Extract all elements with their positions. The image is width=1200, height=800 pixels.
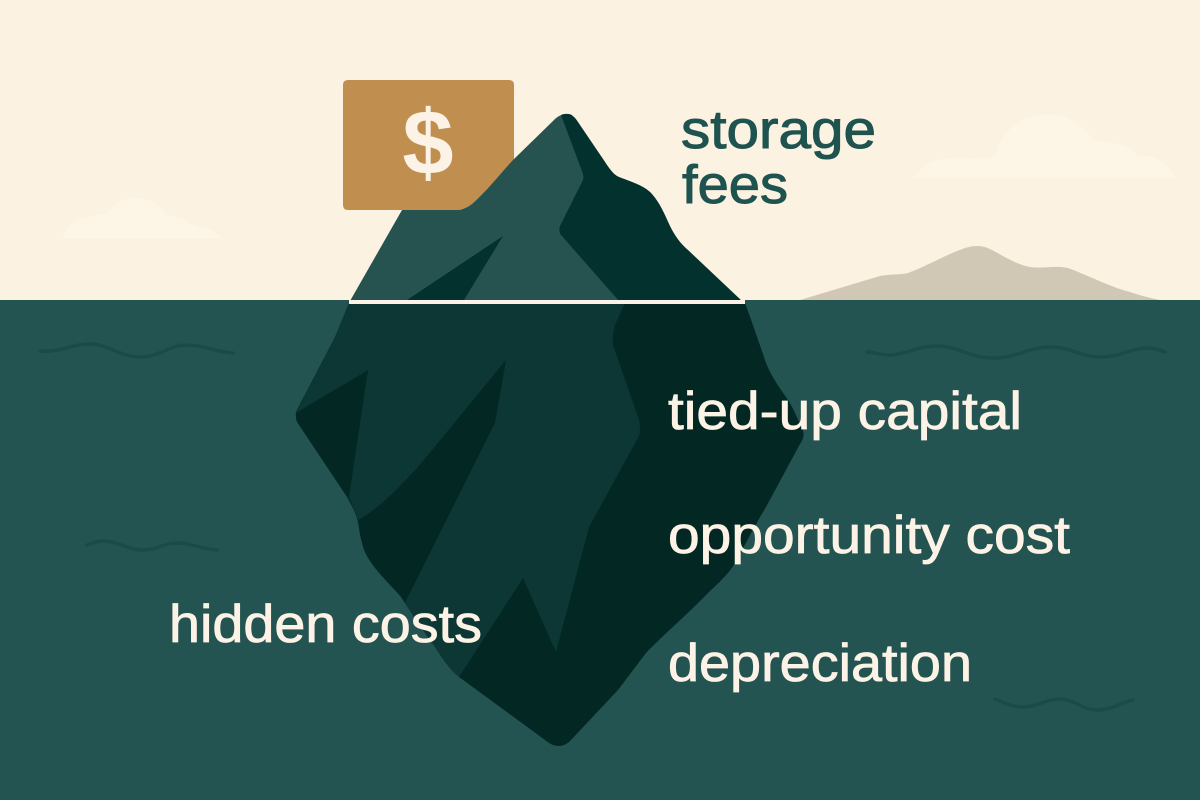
iceberg below water <box>296 303 804 746</box>
sky background <box>0 0 1200 300</box>
tied-up capital: tied-up capital <box>668 382 1022 441</box>
label: hidden costs: hidden costs <box>169 595 482 654</box>
depreciation: depreciation <box>668 634 972 693</box>
submerged mass <box>296 303 804 746</box>
tip: shaded face <box>559 114 742 301</box>
icon: dollar sign: $ <box>402 92 454 194</box>
distant island <box>800 246 1160 300</box>
cloud: left <box>63 198 222 239</box>
opportunity cost: opportunity cost <box>668 506 1070 565</box>
tip: lit face <box>350 114 619 301</box>
wave: upper left <box>40 344 233 357</box>
labels: hidden cost items <box>668 382 1070 693</box>
cloud: right <box>913 115 1175 178</box>
label: storage fees <box>681 100 876 215</box>
water <box>0 300 1200 800</box>
fees: fees <box>682 155 788 215</box>
wave: lower right <box>995 699 1133 710</box>
waterline <box>349 300 745 304</box>
wave: upper right <box>867 346 1165 358</box>
submerged: mid-tone face <box>296 303 640 677</box>
card <box>343 80 514 210</box>
storage: storage <box>681 100 876 160</box>
wave: lower left <box>87 541 217 550</box>
tip: small shadow facet <box>407 236 503 300</box>
price card with dollar sign <box>343 80 514 210</box>
iceberg above water <box>350 114 742 301</box>
